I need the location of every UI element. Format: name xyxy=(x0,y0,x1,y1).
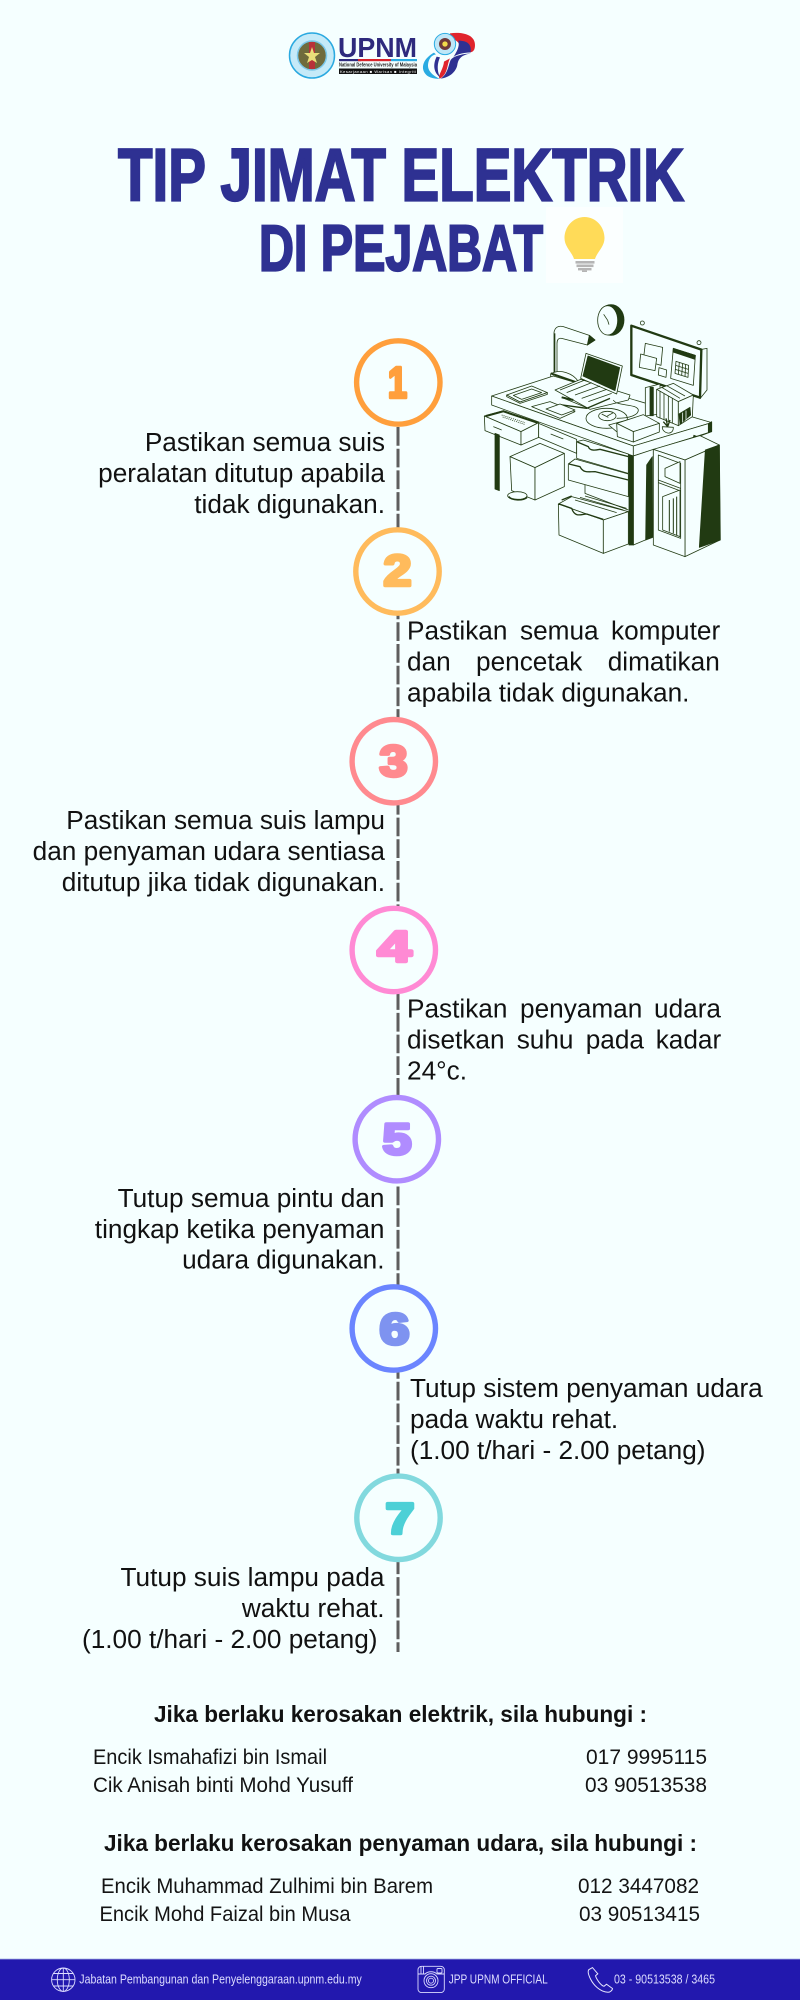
wordmark: National Defence University of Malaysia xyxy=(339,62,417,68)
footer social handle: JPP UPNM OFFICIAL xyxy=(449,1971,548,1986)
heading: Jika berlaku kerosakan penyaman udara, sila hubungi : xyxy=(104,1830,697,1856)
step 7 circle xyxy=(357,1476,440,1560)
step 6 text: pada waktu rehat. xyxy=(410,1404,618,1434)
wordmark: UPNM xyxy=(338,32,417,63)
step 2 circle xyxy=(356,530,439,613)
notebooks and papers xyxy=(507,386,575,418)
laptop xyxy=(555,353,630,409)
footer website: Jabatan Pembangunan dan Penyelenggaraan.upnm.edu.my xyxy=(79,1971,362,1986)
logo: UPNM xyxy=(290,32,475,79)
wordmark: Kesarjanaan ■ Warisan ■ Integriti xyxy=(340,69,416,74)
step 6 circle xyxy=(352,1287,435,1370)
step 1 text: peralatan ditutup apabila xyxy=(98,458,385,488)
step 1 circle: 1 xyxy=(388,358,407,408)
step 5 circle: 5 xyxy=(382,1115,412,1164)
icon: university emblem xyxy=(290,33,334,78)
desk surface xyxy=(492,376,712,456)
heading: Jika berlaku kerosakan elektrik, sila hubungi : xyxy=(154,1701,647,1727)
step 2 text: semua xyxy=(520,616,599,646)
icon: light bulb xyxy=(546,207,623,283)
desk lamp xyxy=(551,326,595,387)
step 4 text: disetkan xyxy=(407,1024,505,1054)
icon: swoosh emblem xyxy=(423,33,475,79)
contact 3 name: Encik Muhammad Zulhimi bin Barem xyxy=(101,1875,433,1898)
contact 1 name: Encik Ismahafizi bin Ismail xyxy=(93,1746,327,1769)
step 5 circle xyxy=(355,1098,438,1181)
wall clock xyxy=(598,305,624,335)
footer band xyxy=(0,1958,800,2000)
step 1 text: Pastikan semua suis xyxy=(145,427,385,457)
icon: instagram xyxy=(418,1966,444,1993)
step 7 circle: 7 xyxy=(386,1494,414,1544)
step 2 text: komputer xyxy=(611,616,720,646)
title line 2: DI PEJABAT xyxy=(259,212,543,284)
contact 2 name: Cik Anisah binti Mohd Yusuff xyxy=(93,1774,353,1797)
desk left leg xyxy=(495,433,499,491)
step 6 circle: 6 xyxy=(380,1305,410,1354)
binders xyxy=(645,383,693,426)
timeline dashed line xyxy=(396,427,400,1652)
footer phone number: 03 - 90513538 / 3465 xyxy=(614,1971,715,1986)
notice board xyxy=(631,321,707,399)
step 4 circle xyxy=(352,908,435,992)
contact block: electrical xyxy=(93,1701,707,1797)
box and plant xyxy=(609,415,673,442)
step 2 text: Pastikan xyxy=(407,616,507,646)
step 2 text: apabila tidak digunakan. xyxy=(407,678,689,708)
step 7 text: waktu rehat. xyxy=(241,1593,384,1623)
waste bin xyxy=(508,443,564,500)
stacked drawers xyxy=(558,440,628,553)
step 4 text: kadar xyxy=(656,1024,721,1054)
middle drawer xyxy=(539,423,577,453)
step 3 text: ditutup jika tidak digunakan. xyxy=(62,867,385,897)
pedestal side and legs xyxy=(585,449,653,545)
open left drawer xyxy=(484,411,539,445)
step 5 text: Tutup semua pintu dan xyxy=(118,1183,384,1213)
step 2 text: pencetak xyxy=(476,646,583,676)
step 4 text: udara xyxy=(654,994,721,1024)
bookcase xyxy=(653,436,720,557)
contact 1 phone: 017 9995115 xyxy=(586,1746,707,1769)
step 2 text: dimatikan xyxy=(608,646,720,676)
step 6 text: Tutup sistem penyaman udara xyxy=(410,1373,763,1403)
step 7 text: Tutup suis lampu pada xyxy=(121,1562,385,1592)
step 4 text: penyaman xyxy=(520,994,642,1024)
contact 4 name: Encik Mohd Faizal bin Musa xyxy=(100,1903,351,1926)
step 4 text: 24°c. xyxy=(407,1056,467,1086)
step 4 circle: 4 xyxy=(378,922,412,972)
title xyxy=(118,134,684,284)
step 1 text: tidak digunakan. xyxy=(194,489,385,519)
step 1 circle xyxy=(357,341,440,424)
contact block: air conditioning xyxy=(100,1830,700,1926)
step 3 circle xyxy=(352,720,435,803)
icon: globe xyxy=(52,1968,75,1991)
icon: phone xyxy=(588,1968,613,1992)
contact 4 phone: 03 90513415 xyxy=(579,1903,700,1926)
step 4 text: Pastikan xyxy=(407,994,507,1024)
step 3 text: dan penyaman udara sentiasa xyxy=(33,836,385,866)
plate and cable xyxy=(586,400,638,428)
contact 2 phone: 03 90513538 xyxy=(585,1774,707,1797)
step 2 text: dan xyxy=(407,646,451,676)
step 3 text: Pastikan semua suis lampu xyxy=(66,805,385,835)
illustration: office desk xyxy=(484,305,720,557)
step 7 text: (1.00 t/hari - 2.00 petang) xyxy=(82,1624,378,1654)
step 5 text: tingkap ketika penyaman xyxy=(95,1214,384,1244)
step 5 text: udara digunakan. xyxy=(182,1244,384,1274)
step 4 text: pada xyxy=(586,1024,644,1054)
step 4 text: suhu xyxy=(517,1024,573,1054)
contact 3 phone: 012 3447082 xyxy=(578,1875,699,1898)
step 6 text: (1.00 t/hari - 2.00 petang) xyxy=(410,1435,706,1465)
step 3 circle: 3 xyxy=(380,737,408,786)
step 2 circle: 2 xyxy=(384,546,412,596)
